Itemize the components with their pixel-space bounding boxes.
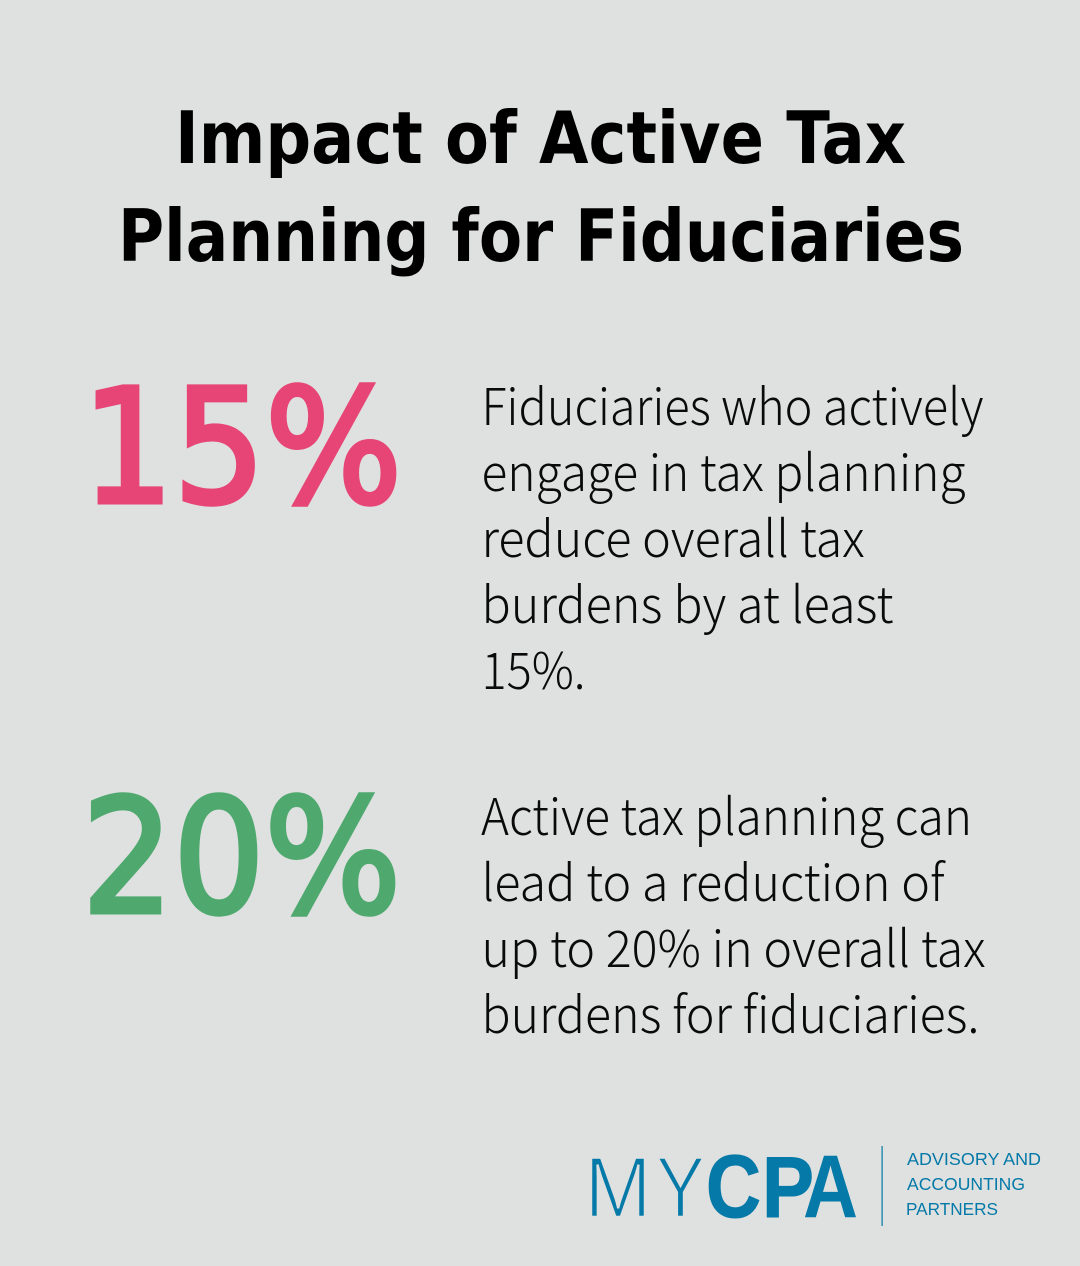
logo: MYCPA: M [584, 1140, 652, 1236]
text block: 15% description [482, 366, 984, 704]
logo: MYCPA: PARTNERS [906, 1199, 998, 1219]
title: Planning for Fiduciaries [118, 194, 964, 278]
text block: 20% description: up to 20% in overall tax [482, 908, 986, 982]
logo: MYCPA: P [762, 1140, 814, 1236]
logo: MYCPA: A [803, 1136, 858, 1236]
logo: MYCPA: ADVISORY AND [907, 1149, 1041, 1169]
text block: 20% description [481, 776, 986, 1048]
text block: 15% description: burdens by at least [482, 564, 894, 638]
stat: 20%: 20% [82, 766, 401, 950]
text block: 20% description: lead to a reduction of [482, 842, 946, 916]
text block: 20% description: burdens for fiduciaries. [482, 974, 980, 1048]
text block: 20% description: Active tax planning can [481, 776, 972, 850]
text block: 15% description: Fiduciaries who actively [482, 366, 984, 440]
text block: 15% description: reduce overall tax [482, 498, 864, 572]
logo: MYCPA: Y [656, 1140, 705, 1236]
title [118, 96, 964, 278]
text block: 15% description: 15%. [482, 630, 586, 704]
logo: MYCPA: ACCOUNTING [907, 1174, 1025, 1194]
title: Impact of Active Tax [175, 96, 906, 180]
stat: 15%: 15% [82, 356, 402, 540]
logo: MYCPA [584, 1136, 1041, 1236]
logo: MYCPA: C [706, 1136, 761, 1236]
text block: 15% description: engage in tax planning [482, 432, 966, 506]
